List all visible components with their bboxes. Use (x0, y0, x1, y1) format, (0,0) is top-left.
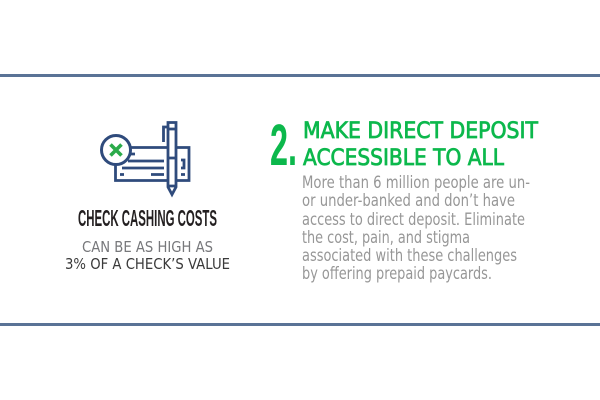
body text: or under-banked and don’t have (302, 191, 515, 210)
circle with x (102, 136, 130, 164)
check outline (116, 148, 189, 180)
number 2: 2. (270, 113, 297, 178)
body text: access to direct deposit. Eliminate (302, 210, 525, 229)
icon: check with pen and green x (102, 122, 189, 194)
title: MAKE DIRECT DEPOSIT (303, 118, 538, 144)
body text: the cost, pain, and stigma (302, 228, 470, 247)
subtext: can be as high as: CAN BE AS HIGH AS (82, 238, 213, 256)
infographic canvas: CHECK CASHING COSTS (78, 205, 217, 231)
body text: by offering prepaid paycards. (302, 264, 492, 283)
title: ACCESSIBLE TO ALL (303, 145, 504, 171)
body text: More than 6 million people are un- (302, 173, 530, 192)
body text (302, 173, 530, 283)
title (303, 118, 538, 171)
body text: associated with these challenges (302, 246, 517, 265)
subtext: 3% of a check's value: 3% OF A CHECK’S VALUE (65, 255, 230, 273)
pen (164, 122, 176, 194)
